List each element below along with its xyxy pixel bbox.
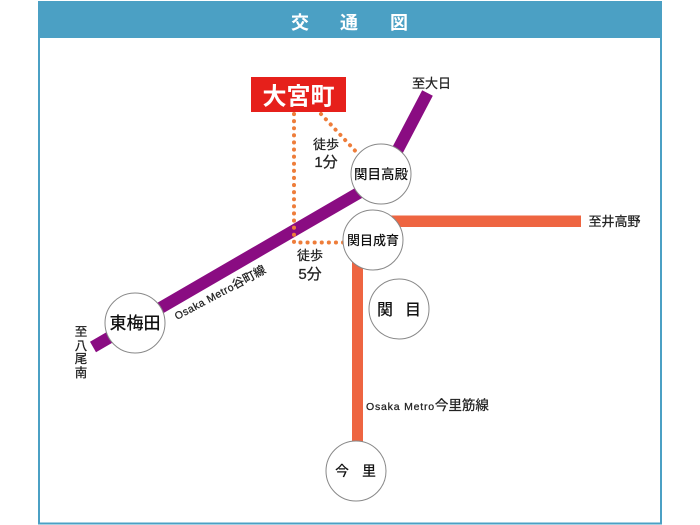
label: for Itakano: 至井高野 <box>588 214 641 229</box>
orange line: Osaka Metro Imazatosuji line <box>352 216 581 443</box>
heading bar: 通 <box>340 13 358 33</box>
label: for Dainichi: 至大日 <box>412 76 451 91</box>
station marker: Omiyacho <box>251 77 346 112</box>
station: Higashi-Umeda: 東梅田 <box>110 314 160 333</box>
label: walk 1 minute <box>313 137 339 171</box>
heading bar <box>38 1 662 38</box>
label: for Yao-minami: 八 <box>75 339 87 353</box>
label: walk 5 minutes: 徒歩 <box>297 248 323 263</box>
station: Sekime Seiiku <box>343 210 403 270</box>
label: walk 1 minute: 徒歩 <box>313 137 339 152</box>
station: Sekime <box>369 279 429 339</box>
label: walk 1 minute: 1分 <box>314 154 338 171</box>
label: for Yao-minami: 尾 <box>75 352 87 366</box>
walking route: dotted paths <box>294 114 360 242</box>
label: for Yao-minami: 南 <box>75 365 87 380</box>
station: Sekime Takadono <box>351 144 411 204</box>
station: Imazato <box>326 441 386 501</box>
label: Tanimachi line name: Osaka Metro谷町線 <box>171 262 268 323</box>
label: Imazatosuji line name: Osaka Metro今里筋線 <box>366 397 489 413</box>
station: Sekime Seiiku: 関目成育 <box>347 233 399 248</box>
heading bar: 図 <box>390 13 408 33</box>
station: Imazato: 里 <box>362 463 376 479</box>
station: Sekime: 関 <box>377 301 393 319</box>
label: walk 5 minutes <box>297 248 323 283</box>
label: for Yao-minami <box>75 325 87 380</box>
station: Imazato: 今 <box>335 463 349 479</box>
station: Higashi-Umeda <box>105 293 165 353</box>
label: walk 5 minutes: 5分 <box>298 266 322 283</box>
heading bar: 交 <box>291 13 309 33</box>
station: Sekime Takadono: 関目高殿 <box>354 166 408 182</box>
station: Sekime: 目 <box>405 302 421 319</box>
purple line: Osaka Metro Tanimachi line <box>93 93 428 347</box>
label: for Yao-minami: 至 <box>75 325 87 339</box>
station marker: Omiyacho: 大宮町 <box>262 84 334 110</box>
